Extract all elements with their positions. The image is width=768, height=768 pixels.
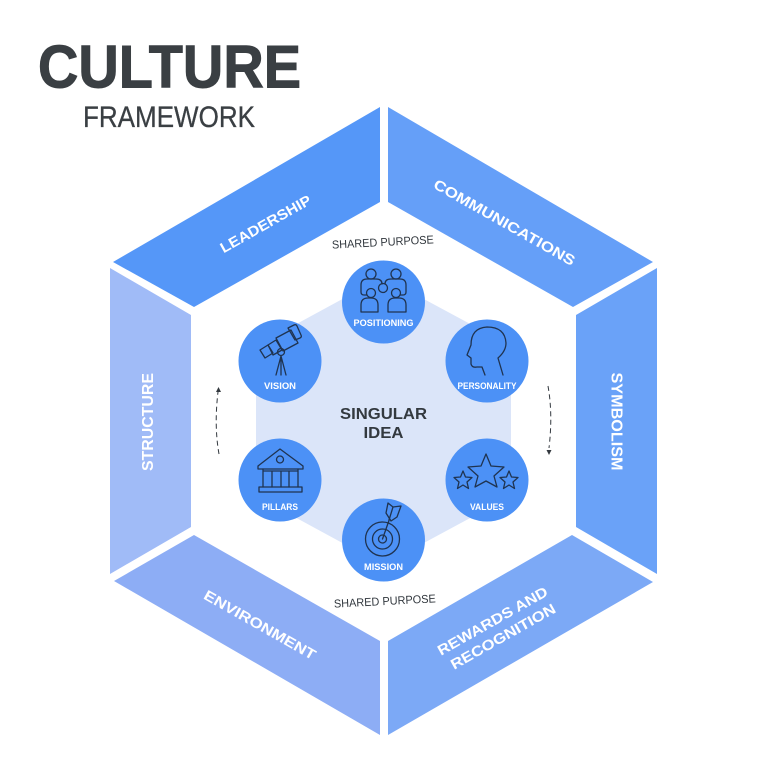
icon: head: [467, 327, 506, 375]
panel: environment: ENVIRONMENT: [201, 588, 318, 664]
title: FRAMEWORK: [83, 101, 255, 134]
circle: mission: [342, 498, 425, 582]
label: shared purpose bottom: SHARED PURPOSE: [334, 593, 436, 611]
panel: rewards and recognition: RECOGNITION: [448, 601, 559, 673]
panel: leadership: LEADERSHIP: [218, 193, 315, 257]
panel: leadership: [113, 107, 380, 307]
circle: mission: MISSION: [364, 562, 403, 572]
circle: values: [446, 438, 528, 522]
icon: stars: [454, 454, 518, 488]
label: shared purpose top: SHARED PURPOSE: [332, 234, 434, 252]
circle: pillars: PILLARS: [262, 502, 298, 512]
circle: vision: VISION: [264, 381, 296, 391]
panel: rewards and recognition: REWARDS AND: [435, 584, 551, 659]
arrow: clockwise left: [216, 387, 221, 454]
circle: vision: [238, 320, 322, 402]
circle: positioning: POSITIONING: [354, 318, 414, 328]
center text: [340, 406, 427, 442]
circle: values: VALUES: [470, 502, 504, 512]
center text: IDEA: [364, 425, 404, 442]
inner hexagon: [256, 277, 511, 565]
panel: environment: [114, 535, 380, 735]
icon: people: [361, 269, 406, 312]
circle: personality: PERSONALITY: [458, 381, 516, 391]
icon: target and dart: [366, 503, 401, 556]
title: [38, 34, 301, 134]
panel: communications: COMMUNICATIONS: [430, 177, 578, 270]
title: CULTURE: [38, 34, 301, 100]
circle: personality: [446, 320, 528, 402]
center text: SINGULAR: [340, 406, 427, 423]
arrow: clockwise right: [546, 386, 552, 455]
panel: symbolism: SYMBOLISM: [608, 372, 624, 470]
panel: communications: [388, 107, 653, 307]
icon: telescope: [260, 325, 301, 375]
circle: positioning: [342, 260, 425, 344]
panel: structure: [110, 268, 191, 574]
panel: structure: STRUCTURE: [140, 373, 157, 471]
panel: symbolism: [576, 268, 657, 574]
panel: rewards and recognition: [388, 535, 653, 735]
icon: bank: [258, 449, 303, 492]
circle: pillars: [238, 438, 322, 522]
